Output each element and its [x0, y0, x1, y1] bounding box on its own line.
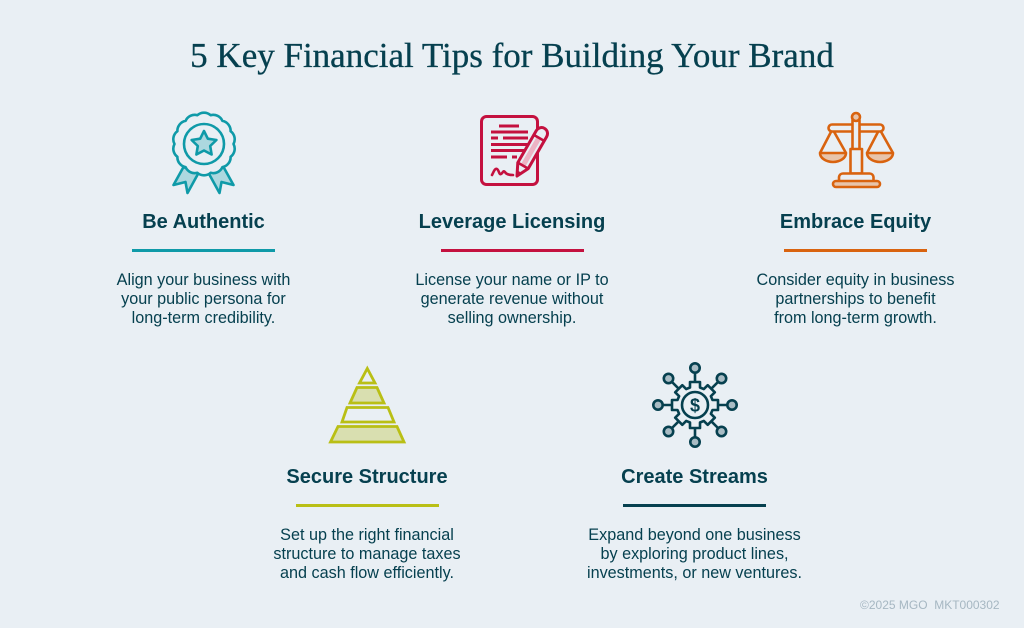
text block — [587, 526, 802, 582]
panel: Create Streams — [587, 362, 802, 582]
divider — [440, 249, 584, 252]
text block — [757, 270, 954, 326]
divider — [784, 249, 927, 252]
icon: balance scale — [818, 112, 894, 188]
icon: gear with dollar sign and network nodes — [652, 362, 738, 448]
text block: License your name or IP to — [415, 270, 609, 288]
icon: award ribbon badge — [172, 111, 236, 194]
heading: Secure Structure — [286, 466, 448, 488]
heading: Leverage Licensing — [419, 211, 605, 233]
text block: Set up the right financial — [280, 526, 454, 544]
text block: Align your business with — [117, 270, 290, 288]
icon: gear with dollar sign and network nodes: $ — [689, 396, 700, 416]
text block: long-term credibility. — [132, 308, 275, 326]
heading: Embrace Equity — [780, 211, 931, 233]
panel: Leverage Licensing — [415, 115, 609, 326]
text block: investments, or new ventures. — [587, 564, 802, 582]
title: 5 Key Financial Tips for Building Your Brand — [190, 36, 834, 75]
heading: Create Streams — [621, 466, 768, 488]
panel: Embrace Equity — [757, 112, 954, 326]
text block: from long-term growth. — [774, 308, 937, 326]
panel: Secure Structure — [273, 366, 461, 582]
text block — [415, 270, 609, 326]
icon: layered pyramid — [328, 366, 406, 444]
text block: and cash flow efficiently. — [280, 564, 454, 582]
text block: Consider equity in business — [757, 270, 954, 288]
divider — [623, 504, 766, 507]
text block: your public persona for — [121, 290, 286, 308]
text block: generate revenue without — [421, 290, 603, 308]
icon: signed document with pencil — [480, 115, 549, 186]
divider — [132, 249, 275, 252]
heading: Be Authentic — [142, 211, 265, 233]
text block: by exploring product lines, — [600, 544, 789, 562]
text block: structure to manage taxes — [273, 544, 461, 562]
divider — [296, 504, 438, 507]
text block: selling ownership. — [448, 308, 576, 326]
text block: Expand beyond one business — [588, 526, 801, 544]
panel: Be Authentic — [116, 111, 290, 326]
text block — [273, 526, 461, 582]
text block — [116, 270, 290, 326]
footer copyright: ©2025 MGO MKT000302 — [860, 598, 1000, 612]
text block: partnerships to benefit — [775, 290, 936, 308]
